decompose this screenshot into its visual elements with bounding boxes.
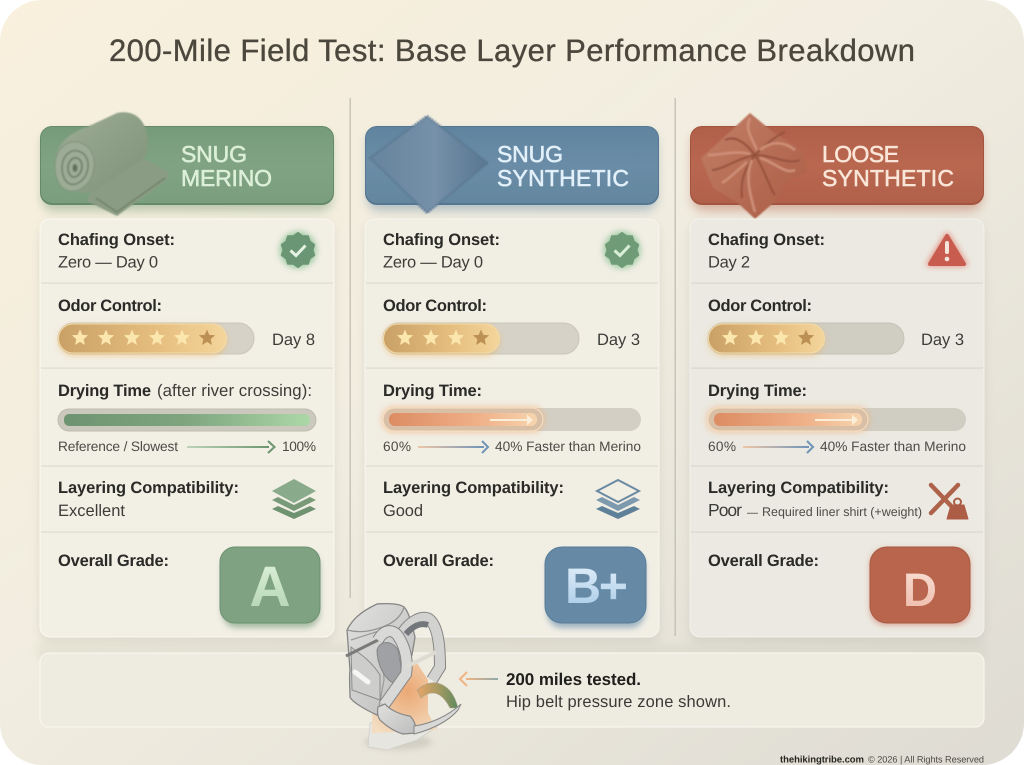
chafing onset — [383, 231, 500, 272]
layering compatibility: Excellent — [58, 502, 125, 520]
header label — [181, 141, 272, 191]
title: 200-Mile Field Test: Base Layer Performance Breakdown — [109, 33, 915, 68]
drying scale: 60% — [708, 439, 736, 454]
drying bar: 60% — [381, 406, 641, 433]
grade badge: A — [220, 547, 320, 628]
odor value: Day 3 — [597, 331, 640, 349]
chafing onset: Chafing Onset: — [58, 231, 175, 249]
icon: solid layers — [272, 479, 316, 519]
pack body — [347, 604, 415, 715]
drying time label: Drying Time — [58, 382, 151, 400]
header label: SYNTHETIC — [497, 165, 629, 191]
drying bar: 60% — [706, 406, 966, 433]
layering compatibility — [58, 479, 239, 520]
grade badge: A: A — [249, 555, 291, 619]
odor value: Day 8 — [272, 331, 315, 349]
footer credit — [780, 754, 984, 765]
layering compatibility: — — [747, 507, 758, 519]
header: Snug Synthetic — [365, 116, 659, 213]
header label — [497, 141, 629, 191]
divider right — [674, 98, 676, 636]
odor rating bar: 4 stars — [383, 323, 579, 356]
footer credit: © 2026 | All Rights Reserved — [868, 754, 984, 764]
drying scale: 100% — [282, 439, 316, 454]
drying time label: (after river crossing): — [157, 381, 312, 400]
drying time label — [58, 381, 312, 400]
overall grade label: Overall Grade: — [383, 552, 494, 570]
bottom band — [38, 645, 986, 727]
layering compatibility: Layering Compatibility: — [708, 479, 889, 497]
divider left — [350, 98, 351, 598]
hip belt — [378, 704, 417, 734]
icon: warning triangle — [929, 235, 965, 264]
chafing onset: Chafing Onset: — [383, 231, 500, 249]
chafing onset: Zero — Day 0 — [58, 254, 158, 272]
icon: outlined layers — [596, 480, 640, 519]
drying scale: Reference / Slowest — [58, 439, 178, 454]
odor rating bar: 6 stars — [58, 323, 254, 356]
header label: MERINO — [181, 165, 272, 191]
layering compatibility: Layering Compatibility: — [58, 479, 239, 497]
front shoulder strap — [378, 631, 407, 705]
chafing onset — [58, 231, 175, 272]
grade badge: B+ — [545, 547, 646, 628]
drying scale: 40% Faster than Merino — [495, 439, 641, 454]
grade badge: B+: B+ — [565, 558, 628, 614]
chafing onset: Day 2 — [708, 254, 750, 272]
header: Snug Merino — [40, 112, 334, 216]
layering compatibility: Layering Compatibility: — [383, 479, 564, 497]
drying time label: Drying Time: — [383, 382, 482, 400]
rear shoulder strap — [403, 618, 440, 680]
icon: twisted synthetic fabric — [701, 113, 807, 219]
callout arrow — [460, 672, 498, 686]
chest strap — [406, 652, 436, 667]
odor control label: Odor Control: — [58, 297, 162, 315]
header: Loose Synthetic — [690, 113, 984, 219]
mesh torso — [368, 715, 437, 750]
column: Snug Merino — [40, 112, 334, 642]
odor control label: Odor Control: — [383, 297, 487, 315]
icon: green check seal — [279, 231, 317, 269]
drying scale — [383, 439, 641, 454]
icon: synthetic fabric square — [370, 116, 488, 213]
layering compatibility: Required liner shirt (+weight) — [762, 505, 922, 519]
drying scale: 40% Faster than Merino — [820, 439, 966, 454]
grade badge: D: D — [903, 563, 937, 616]
chafing onset: Zero — Day 0 — [383, 254, 483, 272]
illustration: backpack with hip belt pressure zone — [346, 604, 461, 750]
chafing onset — [708, 231, 825, 272]
odor rating bar: 4 stars — [708, 323, 904, 356]
drying time label: Drying Time: — [708, 382, 807, 400]
chafing onset: Chafing Onset: — [708, 231, 825, 249]
callout text — [506, 670, 731, 711]
column: Loose Synthetic — [690, 113, 984, 642]
icon: green check seal — [603, 231, 641, 269]
pressure zone — [417, 683, 458, 708]
callout text: 200 miles tested. — [506, 670, 641, 689]
grade badge: D — [870, 547, 970, 625]
header label: SNUG — [181, 141, 247, 167]
drying scale: 60% — [383, 439, 411, 454]
panel: Snug Merino metrics — [40, 219, 334, 642]
layering compatibility — [383, 479, 564, 520]
header label — [822, 141, 954, 191]
drying bar: 100% — [58, 409, 316, 431]
torso highlight — [372, 663, 437, 733]
header label: SNUG — [497, 141, 563, 167]
icon: rolled merino fabric — [55, 112, 169, 216]
column: Snug Synthetic — [365, 116, 659, 642]
icon: crossed layers with weight — [931, 485, 968, 519]
header label: SYNTHETIC — [822, 165, 954, 191]
drying scale — [708, 439, 966, 454]
overall grade label: Overall Grade: — [58, 552, 169, 570]
panel: Snug Synthetic metrics — [365, 219, 659, 642]
header label: LOOSE — [822, 141, 899, 167]
overall grade label: Overall Grade: — [708, 552, 819, 570]
layering compatibility: Good — [383, 502, 423, 520]
odor control label: Odor Control: — [708, 297, 812, 315]
panel: Loose Synthetic metrics — [690, 219, 984, 642]
odor value: Day 3 — [921, 331, 964, 349]
callout text: Hip belt pressure zone shown. — [506, 693, 731, 711]
layering compatibility: Poor — [708, 500, 742, 520]
drying scale — [58, 439, 316, 454]
layering compatibility — [708, 479, 922, 520]
back panel — [377, 642, 402, 683]
